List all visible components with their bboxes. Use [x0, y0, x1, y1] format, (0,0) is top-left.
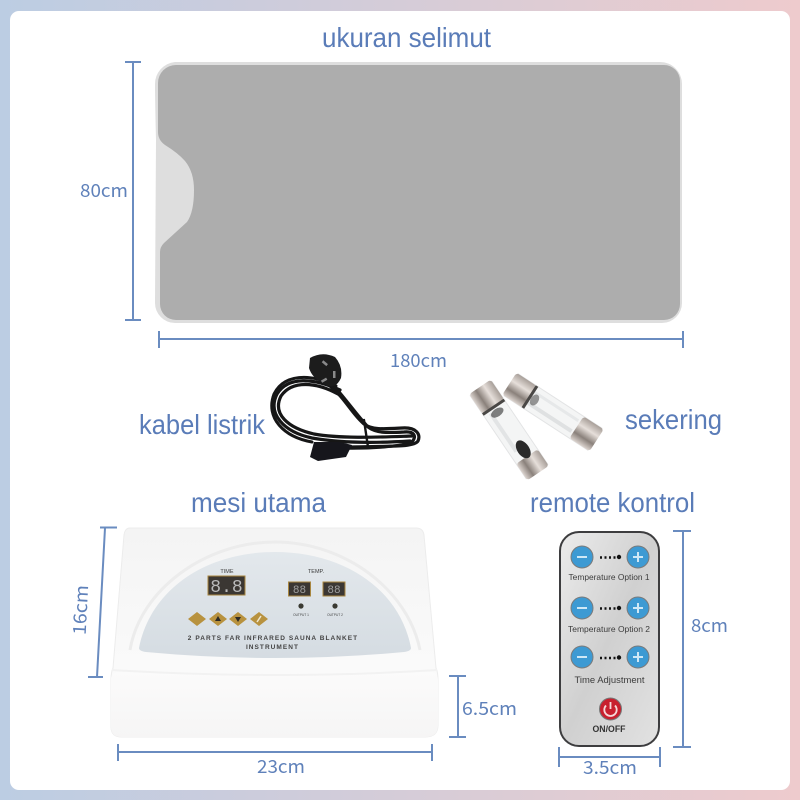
heading: sekering: sekering: [625, 404, 722, 435]
dimension: blanket height 80cm: [80, 62, 141, 320]
device label text: INSTRUMENT: [246, 644, 299, 651]
main device: [111, 528, 438, 737]
blanket illustration: [155, 62, 682, 323]
display: time: 8.8: [210, 578, 243, 598]
icon: connector: [310, 442, 352, 461]
power button: [592, 698, 626, 734]
display: temp 2: [323, 582, 345, 597]
display: temp 2: 88: [327, 585, 341, 597]
dimension: device height 6.5cm: 6.5cm: [462, 695, 517, 721]
dimension: remote width 3.5cm: 3.5cm: [583, 754, 637, 780]
row: temperature option 1: Temperature Option 1: [568, 572, 650, 582]
row: temperature option 1: [568, 546, 650, 582]
output indicators: OUTPUT 2: [327, 613, 343, 617]
remote control: [560, 532, 659, 746]
heading: remote kontrol: remote kontrol: [530, 487, 695, 518]
dimension: remote height 8cm: 8cm: [691, 612, 728, 638]
dimension: blanket height 80cm: 80cm: [80, 177, 128, 203]
dimension: device width 23cm: [118, 744, 432, 779]
dimension: device depth 16cm: 16cm: [66, 584, 94, 636]
dimension: blanket width 180cm: 180cm: [390, 347, 447, 373]
device label text: 2 PARTS FAR INFRARED SAUNA BLANKET: [188, 635, 358, 642]
device label text: [188, 635, 358, 651]
fuse 2: [502, 373, 604, 451]
dimension: remote width 3.5cm: [559, 747, 660, 780]
row: time adjustment: [571, 646, 649, 686]
label: TIME: TIME: [220, 569, 234, 575]
label: TEMP: TEMP.: [308, 569, 325, 575]
row: time adjustment: Time Adjustment: [574, 675, 645, 686]
icon: plug head: [309, 354, 341, 386]
heading: mesi utama: mesi utama: [191, 487, 326, 518]
panel dome: [130, 542, 420, 650]
display: temp 1: [288, 582, 310, 597]
dimension: remote height 8cm: [673, 531, 728, 747]
row: temperature option 2: Temperature Option 2: [568, 624, 650, 634]
heading: ukuran selimut: ukuran selimut: [322, 22, 491, 53]
dimension: device width 23cm: 23cm: [257, 753, 305, 779]
gold control buttons: [188, 612, 268, 626]
heading: kabel listrik: kabel listrik: [139, 409, 266, 440]
icon: fuses: [469, 373, 604, 480]
fuse 1: [469, 380, 549, 480]
power button: ON/OFF: [592, 724, 626, 734]
output indicators: [293, 603, 343, 617]
dimension: device height 6.5cm: [449, 676, 517, 737]
dimension: blanket width 180cm: [159, 331, 683, 373]
icon: power cable: [272, 354, 419, 461]
dimension: device depth 16cm: [66, 528, 117, 677]
display: temp 1: 88: [293, 585, 306, 597]
output indicators: OUTPUT 1: [293, 613, 309, 617]
row: temperature option 2: [568, 597, 650, 634]
